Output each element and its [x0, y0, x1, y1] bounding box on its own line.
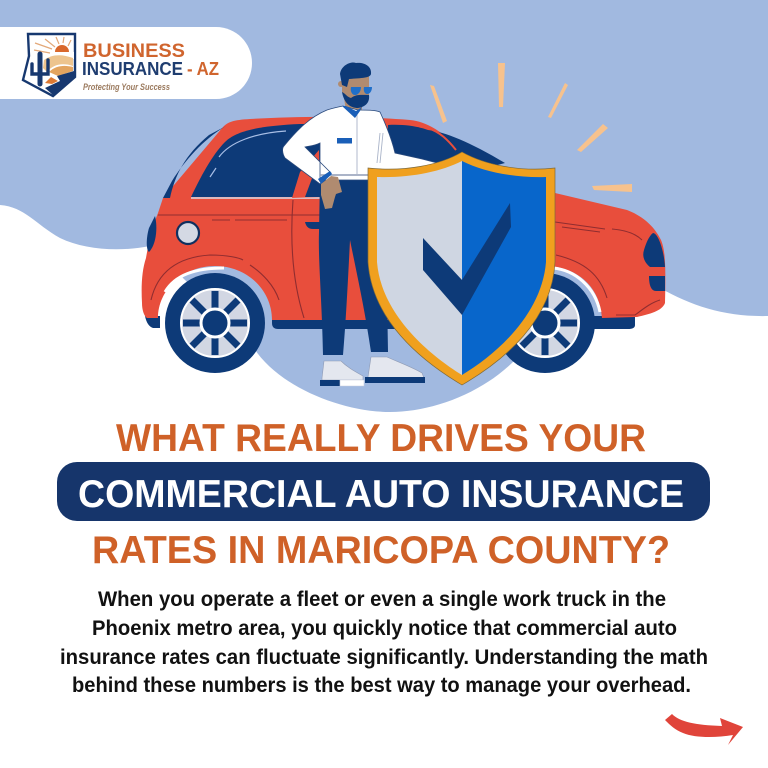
checkmark — [423, 203, 511, 315]
car underbody rails — [145, 316, 635, 329]
left sole toe — [340, 380, 364, 386]
rear wheel — [165, 273, 265, 373]
title pill — [57, 462, 710, 521]
window glare — [210, 131, 286, 177]
name badge — [337, 138, 352, 144]
right sole — [365, 377, 425, 383]
door handle — [305, 222, 320, 229]
trousers — [319, 177, 388, 355]
door pillar — [292, 150, 320, 198]
body paragraph: behind these numbers is the best way to manage your overhead. — [72, 674, 691, 697]
illustration: shield — [368, 152, 555, 385]
rays of light — [430, 63, 632, 192]
headlight — [643, 233, 665, 267]
illustration: car — [142, 117, 665, 373]
blue background blob — [0, 0, 768, 412]
ear — [338, 81, 344, 87]
body paragraph: When you operate a fleet or even a single work truck in the — [98, 588, 666, 611]
logo text: business: BUSINESS — [83, 40, 185, 62]
beard — [342, 92, 369, 108]
collar — [342, 106, 362, 118]
fuel cap — [177, 222, 199, 244]
front fender crease lines — [555, 222, 660, 315]
front wheel — [495, 273, 595, 373]
car body crease lines — [151, 200, 322, 318]
cuff — [318, 171, 332, 184]
window sill — [191, 197, 322, 199]
car body — [142, 117, 665, 320]
neck — [343, 90, 362, 112]
logo tagline: Protecting Your Success — [83, 82, 170, 93]
body paragraph — [60, 588, 708, 697]
title line 1: WHAT REALLY DRIVES YOUR — [116, 417, 646, 460]
body paragraph: insurance rates can fluctuate significantly. Understanding the math — [60, 646, 708, 669]
lower bumper light — [649, 276, 665, 291]
side window — [191, 124, 345, 197]
tail light — [147, 216, 156, 252]
logo badge — [0, 27, 252, 99]
windshield — [385, 125, 505, 175]
face — [342, 74, 369, 106]
arrow — [665, 714, 743, 745]
roof stripe — [428, 128, 456, 150]
shield blue half — [462, 161, 546, 375]
illustration: man — [283, 63, 445, 386]
shirt sleeve folds — [357, 113, 383, 174]
shield light half — [377, 161, 462, 375]
logo text: insurance: INSURANCE — [82, 59, 183, 79]
rear pillar stripe — [163, 126, 226, 198]
waistband — [320, 174, 368, 176]
wheel arch highlights — [165, 268, 600, 312]
logo text: az suffix: - AZ — [187, 59, 219, 79]
hand — [321, 176, 342, 209]
sunglasses — [351, 87, 372, 95]
title pill: COMMERCIAL AUTO INSURANCE — [78, 473, 684, 516]
title line 3: RATES IN MARICOPA COUNTY? — [92, 529, 670, 572]
shield orange frame — [368, 152, 555, 385]
hair — [340, 63, 371, 87]
left shoe — [322, 361, 363, 380]
body paragraph: Phoenix metro area, you quickly notice that commercial auto — [92, 617, 677, 640]
left sole — [320, 380, 340, 386]
shirt — [283, 106, 445, 184]
right shoe — [368, 357, 424, 378]
icon: arizona shield logo — [23, 34, 75, 96]
window rear of door — [305, 165, 322, 197]
